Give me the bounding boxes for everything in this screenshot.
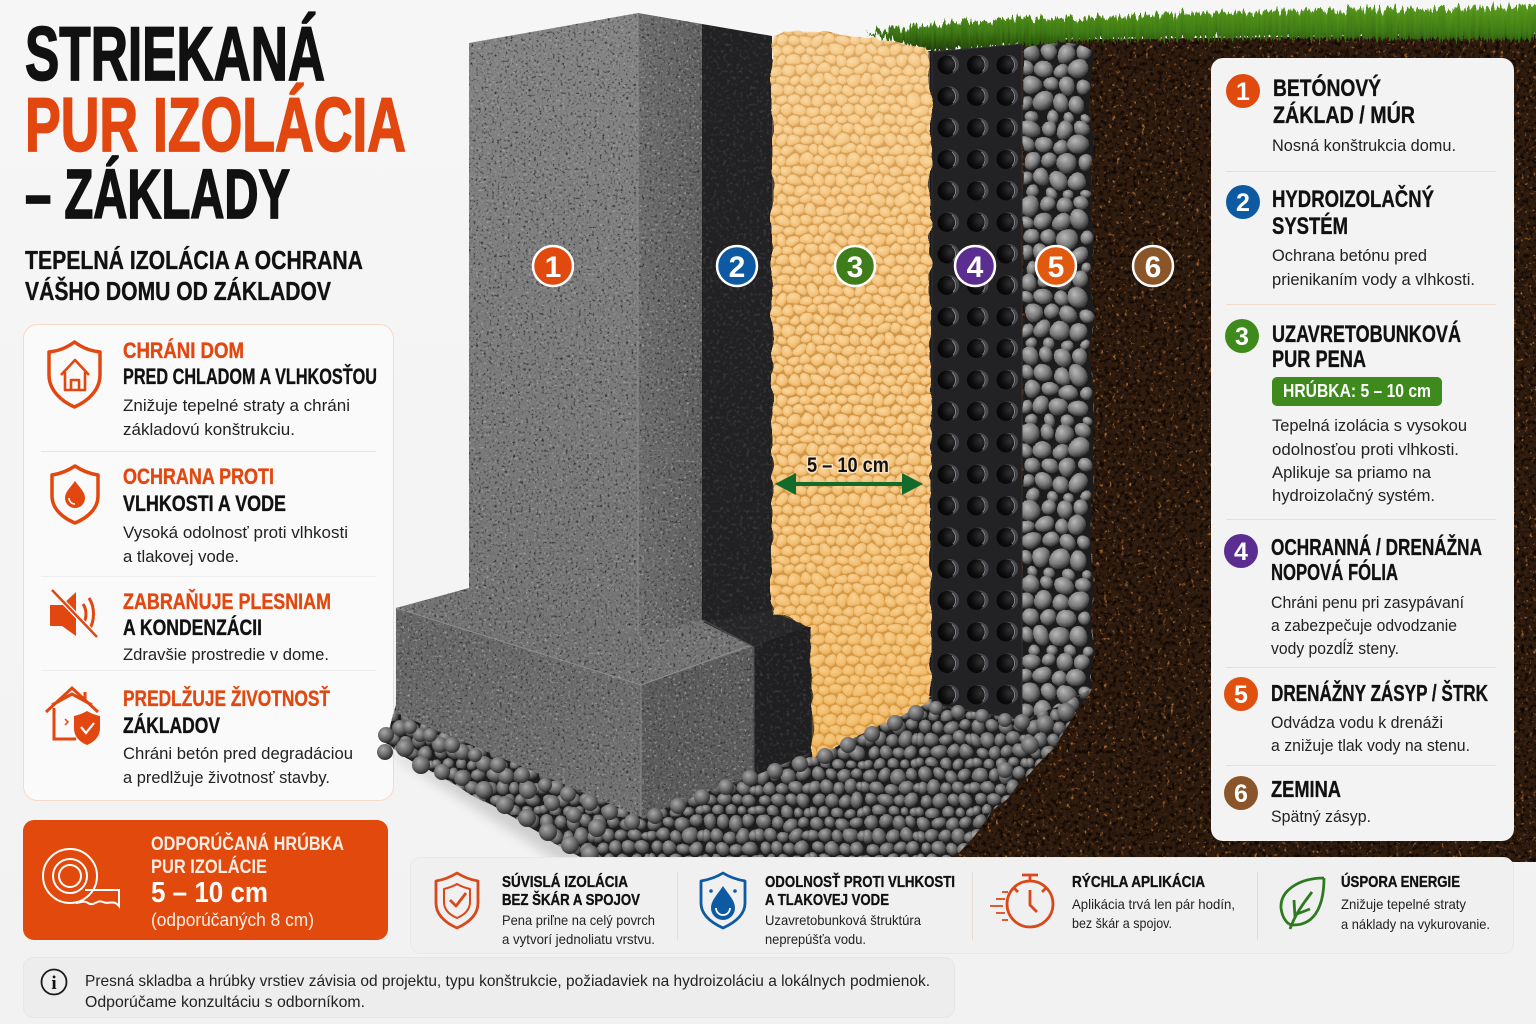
icon: muted speaker (50, 590, 97, 637)
legend item 4: Chráni penu pri zasypávaní (1271, 594, 1464, 612)
legend item 3: Tepelná izolácia s vysokou (1272, 417, 1467, 435)
thickness text: PUR IZOLÁCIE (151, 856, 267, 878)
layer 2: waterproofing membrane (702, 24, 772, 630)
layer 3: closed-cell PUR foam (772, 31, 930, 757)
benefit 3 text: A KONDENZÁCII (123, 615, 262, 640)
feature 4 text: a náklady na vykurovanie. (1341, 916, 1490, 932)
feature 2 text: Uzavretobunková štruktúra (765, 912, 921, 928)
feature 2 text (765, 872, 955, 947)
note text (85, 973, 930, 1011)
icon: stopwatch (990, 875, 1053, 927)
benefit 1 text: základovú konštrukciu. (123, 420, 295, 439)
legend item 6: 6 (1234, 780, 1248, 808)
layer badge 1 (533, 246, 573, 286)
note text: Presná skladba a hrúbky vrstiev závisia od projektu, typu konštrukcie, požiadaviek na hydroizoláciu a lokálnych podmienok. (85, 973, 930, 990)
icon: orange shield (436, 873, 478, 928)
legend item 1 (1226, 74, 1456, 155)
thickness dimension arrow (775, 454, 923, 495)
legend item 2: prienikaním vody a vlhkosti. (1272, 271, 1475, 289)
layer 5: drainage gravel column (1020, 43, 1093, 722)
legend item 4: a zabezpečuje odvodzanie (1271, 617, 1457, 635)
grass (867, 6, 1536, 52)
legend item 3: 3 (1235, 323, 1249, 351)
layer badge 2: 2 (729, 251, 745, 284)
feature 1 text: SÚVISLÁ IZOLÁCIA (502, 872, 628, 891)
feature 1 text: Pena priľne na celý povrch (502, 912, 655, 928)
note text: Odporúčame konzultáciu s odborníkom. (85, 994, 365, 1011)
benefit 4 text (123, 686, 353, 787)
layer badge 6 (1133, 246, 1173, 286)
benefit 3 text (123, 589, 331, 664)
benefit 4 text: ZÁKLADOV (123, 713, 220, 738)
legend item 4: vody pozdĺž steny. (1271, 639, 1399, 658)
legend item 6 (1224, 776, 1371, 826)
feature 2 text: neprepúšťa vodu. (765, 931, 866, 947)
thickness text (151, 833, 344, 930)
legend item 5: a znižuje tlak vody na stenu. (1271, 737, 1470, 755)
feature 3 text: RÝCHLA APLIKÁCIA (1072, 872, 1205, 891)
legend item 3: UZAVRETOBUNKOVÁ (1272, 320, 1461, 348)
feature 4 text: ÚSPORA ENERGIE (1341, 872, 1460, 891)
membrane over footing (703, 610, 812, 776)
feature 3 text: bez škár a spojov. (1072, 915, 1172, 931)
layer 1: concrete wall (469, 13, 702, 640)
legend item 1: ZÁKLAD / MÚR (1273, 101, 1415, 129)
concrete footing (396, 588, 755, 817)
title (25, 12, 406, 233)
icon: info: i (51, 973, 57, 994)
benefit 1 text: Znižuje tepelné straty a chráni (123, 396, 350, 415)
legend item 6: Spätný zásyp. (1271, 808, 1371, 826)
benefit 1 text: CHRÁNI DOM (123, 338, 244, 363)
layer badge 6: 6 (1145, 251, 1161, 284)
feature 4 text (1341, 872, 1490, 932)
legend item 1: 1 (1236, 78, 1250, 106)
panel: recommended thickness (23, 820, 388, 940)
layer badge 5 (1036, 246, 1076, 286)
legend item 2 (1226, 185, 1475, 289)
legend item 4: NOPOVÁ FÓLIA (1271, 558, 1398, 585)
legend item 2: SYSTÉM (1272, 212, 1348, 240)
legend item 4 (1224, 533, 1482, 658)
note box (24, 958, 954, 1018)
panel: feature bar (410, 858, 1514, 954)
legend item 3: odolnosťou proti vlhkosti. (1272, 441, 1459, 459)
thickness text: ODPORÚČANÁ HRÚBKA (151, 833, 344, 855)
cross-section illustration (377, 6, 1536, 863)
legend item 2: HYDROIZOLAČNÝ (1272, 185, 1434, 213)
title: STRIEKANÁ (25, 12, 325, 97)
benefit 1 text (123, 338, 377, 439)
layer badge 3: 3 (847, 251, 863, 284)
gravel stones along the edges (377, 701, 1075, 863)
layer badge 4 (955, 246, 995, 286)
benefit 2 text: a tlakovej vode. (123, 547, 239, 566)
feature 4 text: Znižuje tepelné straty (1341, 896, 1466, 912)
icon: leaf (1281, 878, 1324, 929)
thickness pill (1272, 377, 1442, 406)
benefit 3 text: ZABRAŇUJE PLESNIAM (123, 589, 331, 614)
icon: info (42, 970, 66, 994)
legend item 5 (1224, 677, 1488, 755)
subtitle: VÁŠHO DOMU OD ZÁKLADOV (25, 276, 332, 306)
thickness text: 5 – 10 cm (151, 877, 268, 909)
legend item 1: Nosná konštrukcia domu. (1272, 137, 1456, 155)
thickness pill: HRÚBKA: 5 – 10 cm (1283, 380, 1431, 401)
layer badge 2 (717, 246, 757, 286)
feature 1 text: BEZ ŠKÁR A SPOJOV (502, 890, 640, 909)
thickness dimension arrow: 5 – 10 cm (807, 454, 889, 477)
benefit 2 text: OCHRANA PROTI (123, 464, 274, 489)
legend item 1: BETÓNOVÝ (1273, 74, 1381, 102)
icon: shield with house (49, 342, 100, 407)
benefit 4 text: Chráni betón pred degradáciou (123, 744, 353, 763)
layer 4: dimple membrane (932, 44, 1022, 720)
icon: shield with water drop (52, 466, 98, 523)
gravel bed (385, 688, 1092, 862)
benefit 2 text: Vysoká odolnosť proti vlhkosti (123, 523, 348, 542)
subtitle (25, 245, 363, 306)
layer badge 1: 1 (545, 251, 561, 284)
benefit 4 text: a predlžuje životnosť stavby. (123, 768, 330, 787)
title: PUR IZOLÁCIA (25, 83, 406, 168)
panel: layer legend (1211, 58, 1514, 841)
legend item 3: hydroizolačný systém. (1272, 487, 1435, 505)
benefit 4 text: PREDLŽUJE ŽIVOTNOSŤ (123, 686, 330, 711)
feature 3 text (1072, 872, 1235, 931)
title: – ZÁKLADY (25, 155, 290, 233)
feature 3 text: Aplikácia trvá len pár hodín, (1072, 896, 1235, 912)
icon: house with shield (46, 688, 100, 745)
feature 2 text: ODOLNOSŤ PROTI VLHKOSTI (765, 872, 955, 891)
legend item 5: 5 (1234, 681, 1248, 709)
thickness text: (odporúčaných 8 cm) (151, 910, 314, 930)
feature 2 text: A TLAKOVEJ VODE (765, 892, 889, 909)
legend item 2: Ochrana betónu pred (1272, 247, 1427, 265)
layer badge 5: 5 (1048, 251, 1064, 284)
layer 6: soil (956, 34, 1536, 862)
legend item 3 (1225, 319, 1467, 505)
legend item 6: ZEMINA (1271, 776, 1341, 802)
dark backing behind foam (762, 49, 960, 742)
subtitle: TEPELNÁ IZOLÁCIA A OCHRANA (25, 245, 363, 275)
feature 1 text (502, 872, 655, 947)
icon: blue shield with drop (701, 873, 745, 928)
benefit 3 text: Zdravšie prostredie v dome. (123, 645, 329, 664)
legend item 2: 2 (1236, 189, 1250, 217)
icon: foam roll (43, 849, 119, 906)
feature 1 text: a vytvorí jednoliatu vrstvu. (502, 931, 655, 947)
panel: benefits (24, 324, 394, 800)
benefit 2 text (123, 464, 348, 566)
benefit 2 text: VLHKOSTI A VODE (123, 491, 286, 516)
benefit 1 text: PRED CHLADOM A VLHKOSŤOU (123, 364, 377, 389)
layer badge 4: 4 (967, 251, 984, 284)
legend item 3: PUR PENA (1272, 346, 1366, 373)
legend item 3: Aplikuje sa priamo na (1272, 464, 1432, 482)
legend item 5: Odvádza vodu k drenáži (1271, 714, 1443, 732)
layer badge 3 (835, 246, 875, 286)
legend item 4: 4 (1234, 538, 1248, 566)
